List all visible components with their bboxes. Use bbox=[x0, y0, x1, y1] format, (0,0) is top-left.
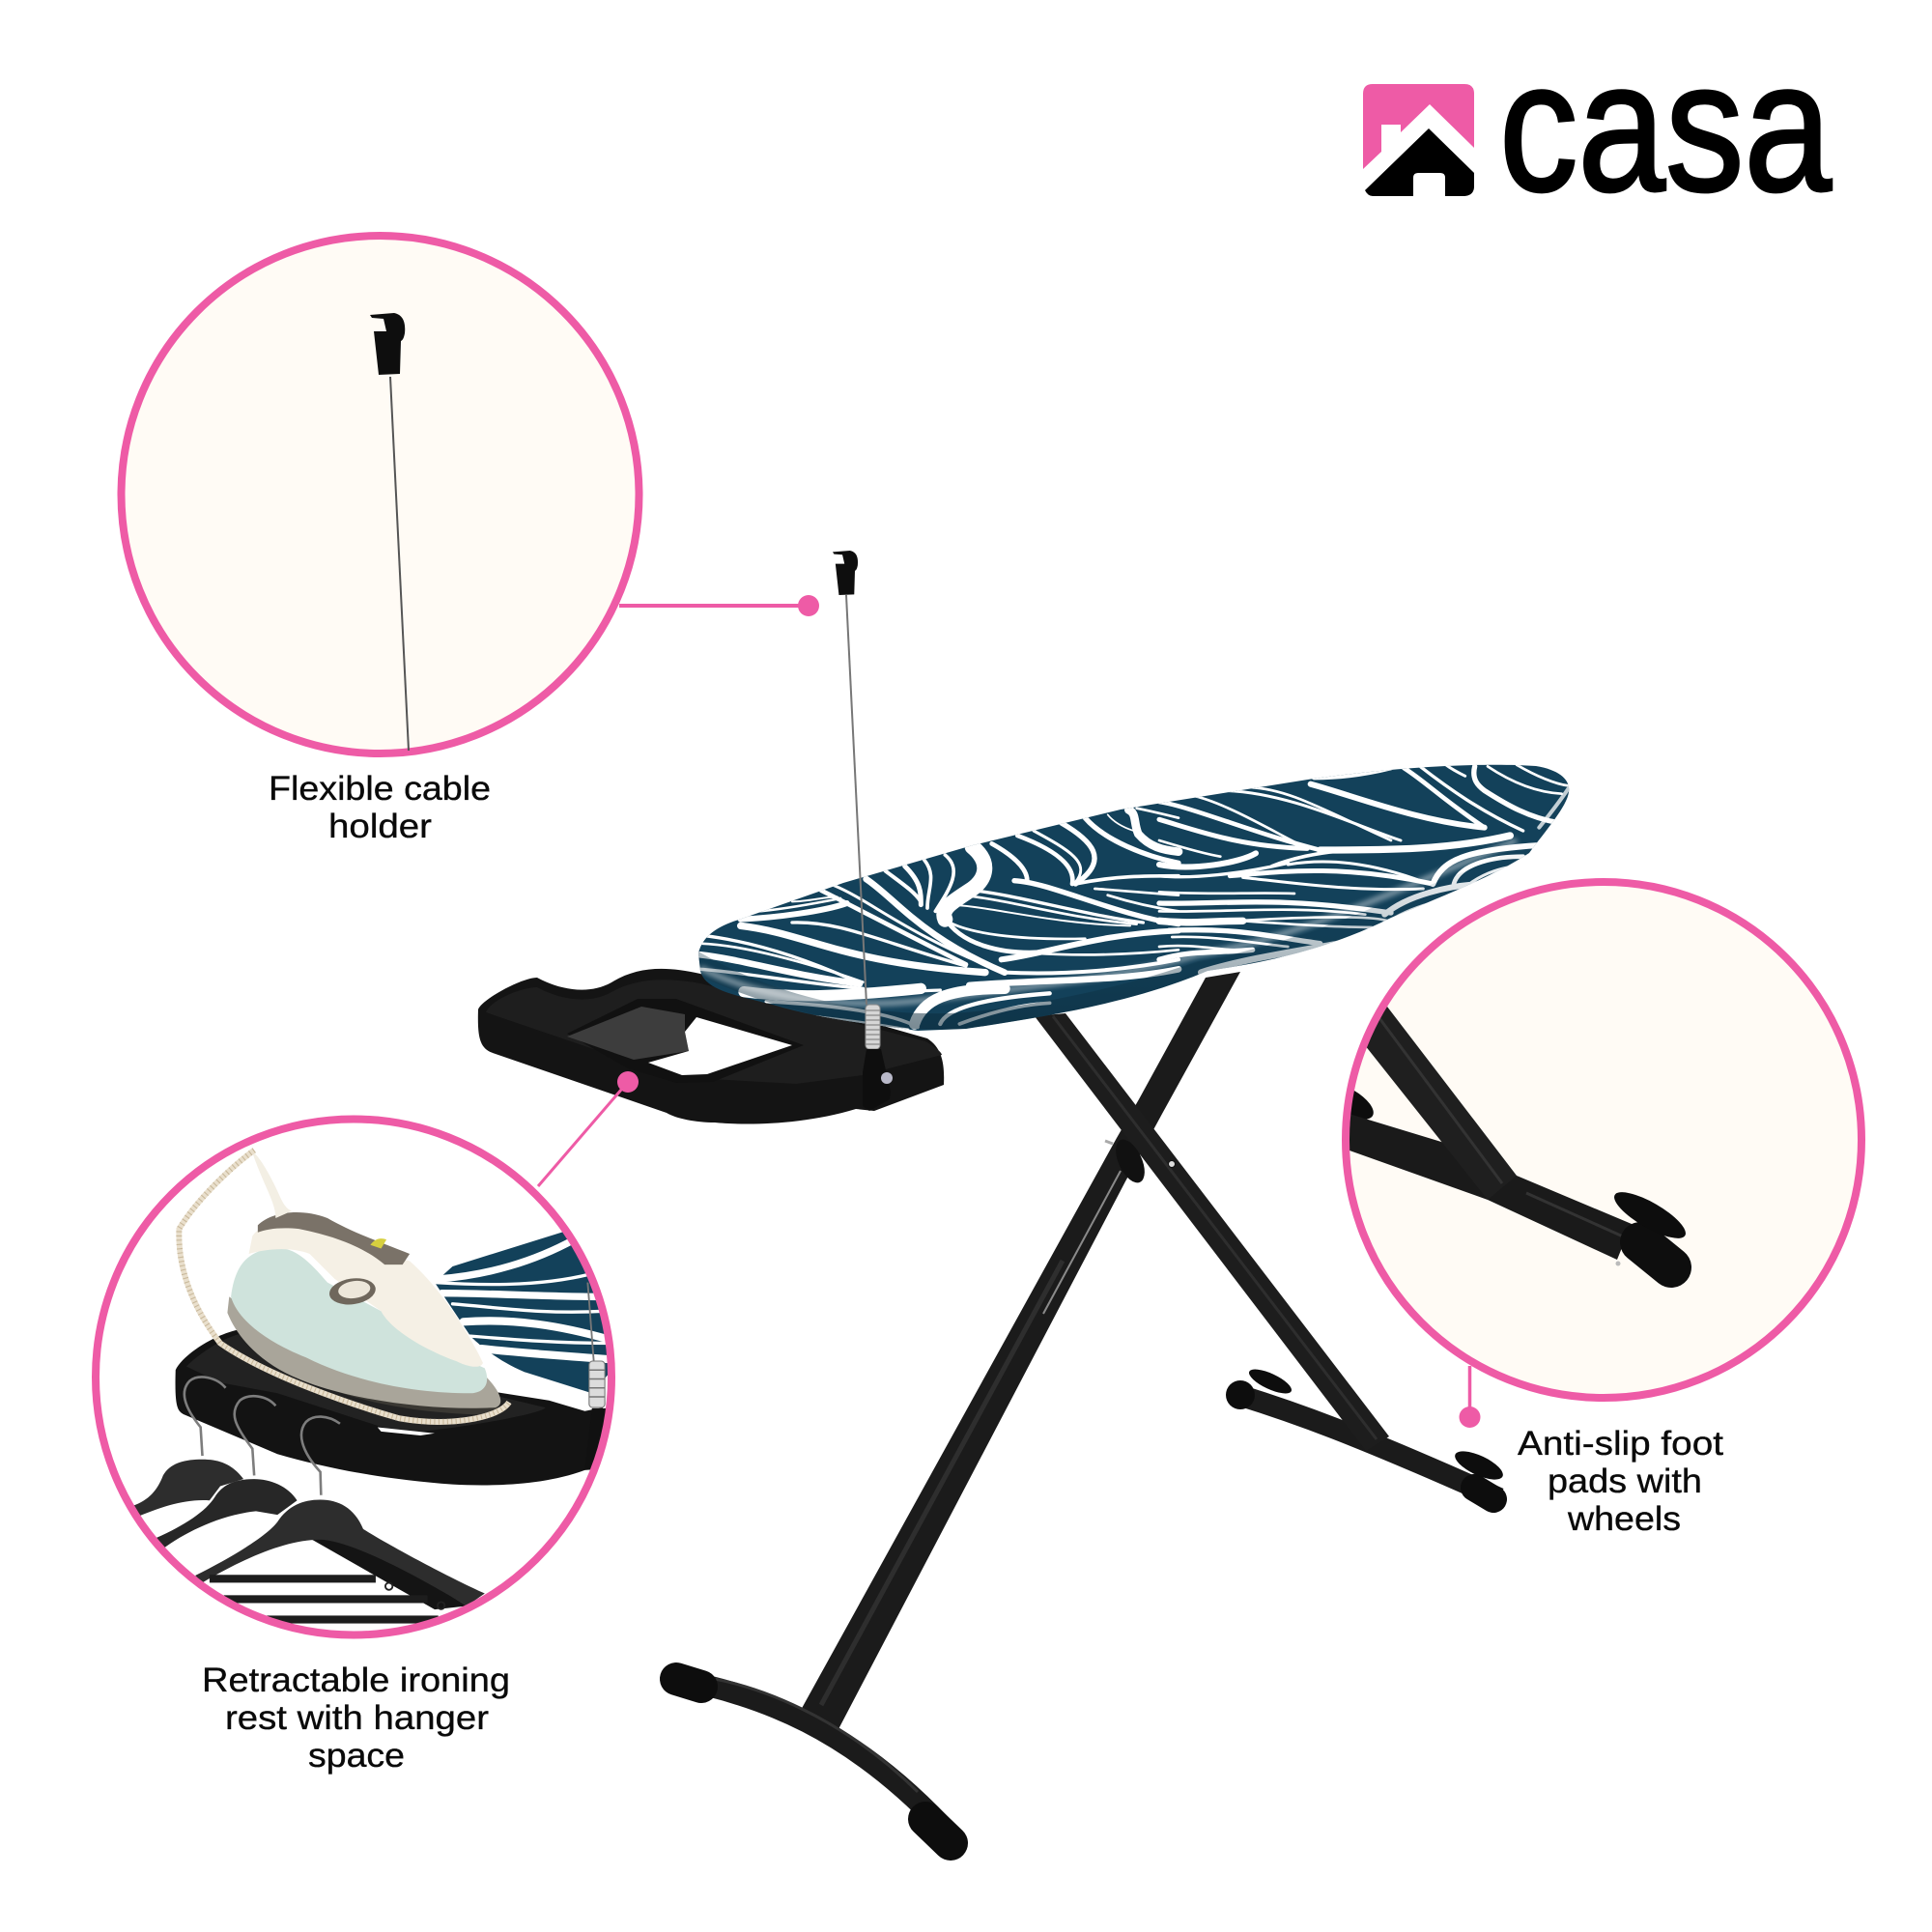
label: retractable ironing rest: space bbox=[308, 1737, 405, 1775]
tray recess bbox=[567, 999, 804, 1083]
connector: foot pads callout bbox=[1459, 1366, 1480, 1428]
foot bar detail bbox=[1333, 1109, 1632, 1260]
label: flexible cable holder bbox=[269, 770, 491, 845]
label: flexible cable holder: holder bbox=[328, 808, 432, 845]
wheel cap detail bbox=[1640, 1242, 1671, 1267]
label: retractable ironing rest: rest with hanger bbox=[225, 1699, 489, 1737]
tray grey plate bbox=[567, 1007, 689, 1060]
label: anti-slip foot pads: Anti-slip foot bbox=[1518, 1425, 1723, 1463]
logo icon: black house bbox=[1365, 128, 1474, 196]
diagonal leg detail bbox=[1357, 1007, 1517, 1200]
hangers bbox=[132, 1460, 485, 1624]
flexible cable holder on board bbox=[833, 551, 893, 1111]
callout circle: cable holder bbox=[122, 236, 639, 753]
left pad detail bbox=[1350, 1091, 1374, 1119]
wave pattern: left half bbox=[700, 809, 1179, 1030]
wave pattern: right half bbox=[1159, 765, 1568, 973]
wire bbox=[846, 595, 867, 1005]
hinge and bolts bbox=[1105, 1135, 1175, 1187]
label: anti-slip foot pads: wheels bbox=[1567, 1500, 1681, 1538]
label: anti-slip foot pads: pads with bbox=[1548, 1463, 1702, 1500]
tray opening bbox=[648, 1017, 792, 1075]
spring bbox=[866, 1005, 880, 1049]
retractable tray bbox=[478, 969, 944, 1124]
label: flexible cable holder: Flexible cable bbox=[269, 770, 491, 808]
bracket bbox=[863, 1049, 891, 1111]
label: anti-slip foot pads bbox=[1518, 1425, 1723, 1538]
connector: cable holder callout bbox=[619, 595, 819, 616]
pad detail bbox=[1614, 1192, 1686, 1238]
board corner bbox=[435, 1231, 613, 1393]
logo wordmark: casa bbox=[1499, 22, 1832, 230]
logo icon: pink roof panel bbox=[1363, 84, 1474, 169]
iron bbox=[227, 1212, 502, 1414]
power cord bbox=[179, 1151, 509, 1422]
label: retractable ironing rest bbox=[202, 1662, 510, 1775]
label: retractable ironing rest: Retractable ironing bbox=[202, 1662, 510, 1699]
ironing board cover bbox=[698, 765, 1569, 1031]
hanger hooks bbox=[185, 1378, 340, 1495]
wire detail bbox=[390, 377, 409, 751]
logo bbox=[1363, 22, 1832, 230]
callout circle: foot pads bbox=[1317, 882, 1861, 1398]
bolt bbox=[881, 1072, 893, 1084]
ironing board legs bbox=[676, 972, 1507, 1843]
tray top surface bbox=[486, 980, 942, 1084]
tray bbox=[176, 1329, 607, 1485]
spring and wire detail bbox=[585, 1283, 606, 1470]
long leg with T foot bbox=[676, 972, 1240, 1843]
connector: ironing rest callout bbox=[538, 1071, 639, 1186]
short leg with wheel foot bbox=[1035, 1013, 1507, 1499]
large hook detail bbox=[370, 313, 405, 375]
board rim shading bbox=[698, 840, 1536, 1030]
small hook bbox=[833, 551, 858, 595]
callout circle: ironing rest with hangers bbox=[96, 1119, 613, 1634]
